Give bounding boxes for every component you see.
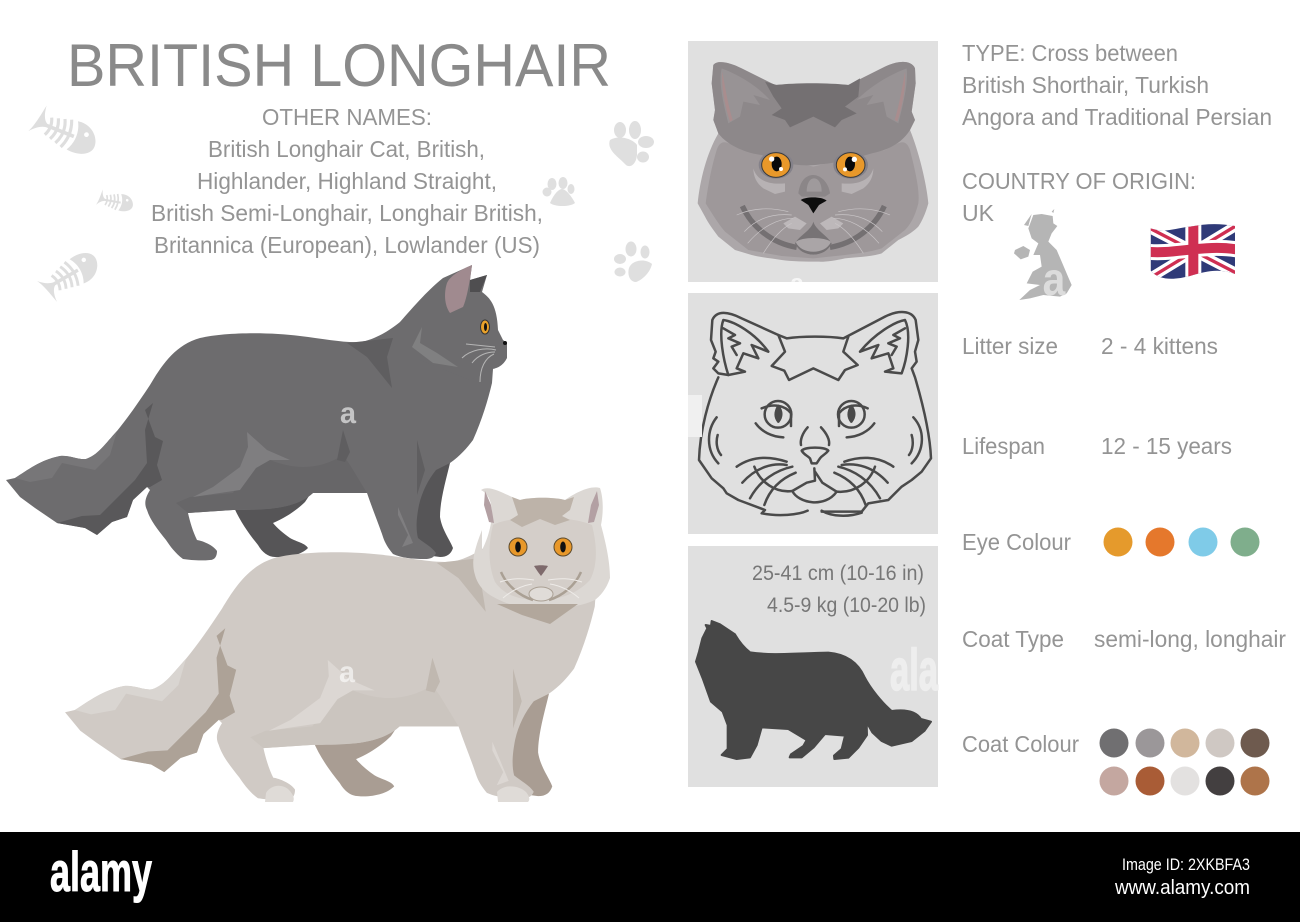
watermark letter: a — [340, 397, 356, 430]
stat: lifespan: 12 - 15 years — [1101, 433, 1232, 459]
stat: lifespan: Lifespan — [962, 433, 1045, 459]
panel: size and silhouette — [688, 546, 938, 787]
legend: eye colour — [962, 528, 1260, 556]
icon: UK map — [1014, 209, 1072, 305]
text block: other names: British Longhair Cat, British, — [208, 136, 485, 162]
text block: type — [962, 40, 1272, 130]
text block: other names: Britannica (European), Lowlander (US) — [154, 232, 540, 258]
watermark fragment — [688, 395, 702, 437]
text block: other names: OTHER NAMES: — [262, 104, 432, 130]
size text: 25-41 cm (10-16 in) — [752, 562, 924, 585]
icon: paw print 1 — [609, 121, 654, 166]
illustration: blue-grey longhair cat in profile — [6, 265, 507, 560]
stat: coat type — [962, 626, 1286, 652]
icon: UK flag — [1150, 224, 1235, 279]
watermark fragment: ala — [890, 638, 938, 703]
panel: line-art cat face — [688, 293, 938, 534]
text block: country of origin: UK — [962, 200, 995, 226]
legend: coat colour: Coat Colour — [962, 731, 1079, 757]
title: BRITISH LONGHAIR — [67, 32, 611, 99]
panel: coloured cat face — [688, 41, 938, 282]
website: www.alamy.com — [1114, 877, 1250, 899]
text block: type: British Shorthair, Turkish — [962, 72, 1209, 98]
legend: eye colour: Eye Colour — [962, 529, 1071, 555]
footer bar — [0, 832, 1300, 922]
footer logo: alamy — [50, 840, 152, 903]
icon: fish bone 2 — [96, 189, 135, 213]
text block: other names: Highlander, Highland Straight, — [197, 168, 497, 194]
stat: litter size: 2 - 4 kittens — [1101, 333, 1218, 359]
icon: UK map: a — [1043, 253, 1066, 305]
illustration: lilac longhair cat, front-facing head — [65, 487, 610, 802]
watermark letter: a — [790, 529, 805, 556]
stat: lifespan — [962, 433, 1232, 459]
icon: fish bone 3 — [36, 247, 105, 305]
icon: paw print 2 — [542, 177, 575, 206]
cat silhouette — [696, 621, 931, 759]
text block: country of origin: COUNTRY OF ORIGIN: — [962, 168, 1196, 194]
stat: coat type: Coat Type — [962, 626, 1064, 652]
watermark letter: a — [790, 270, 805, 297]
stat: litter size: Litter size — [962, 333, 1058, 359]
icon: paw print 3 — [614, 242, 652, 282]
text block: country of origin — [962, 168, 1196, 226]
legend: coat colour — [962, 728, 1270, 796]
text block: type: Angora and Traditional Persian — [962, 104, 1272, 130]
stat: coat type: semi-long, longhair — [1094, 626, 1286, 652]
icon: fish bone 1 — [27, 103, 102, 159]
text block: type: TYPE: Cross between — [962, 40, 1178, 66]
stat: litter size — [962, 333, 1218, 359]
text block: other names — [151, 104, 543, 258]
weight text: 4.5-9 kg (10-20 lb) — [767, 594, 926, 617]
image id: Image ID: 2XKBFA3 — [1122, 855, 1250, 874]
watermark letter: a — [339, 656, 355, 689]
text block: other names: British Semi-Longhair, Longhair British, — [151, 200, 543, 226]
